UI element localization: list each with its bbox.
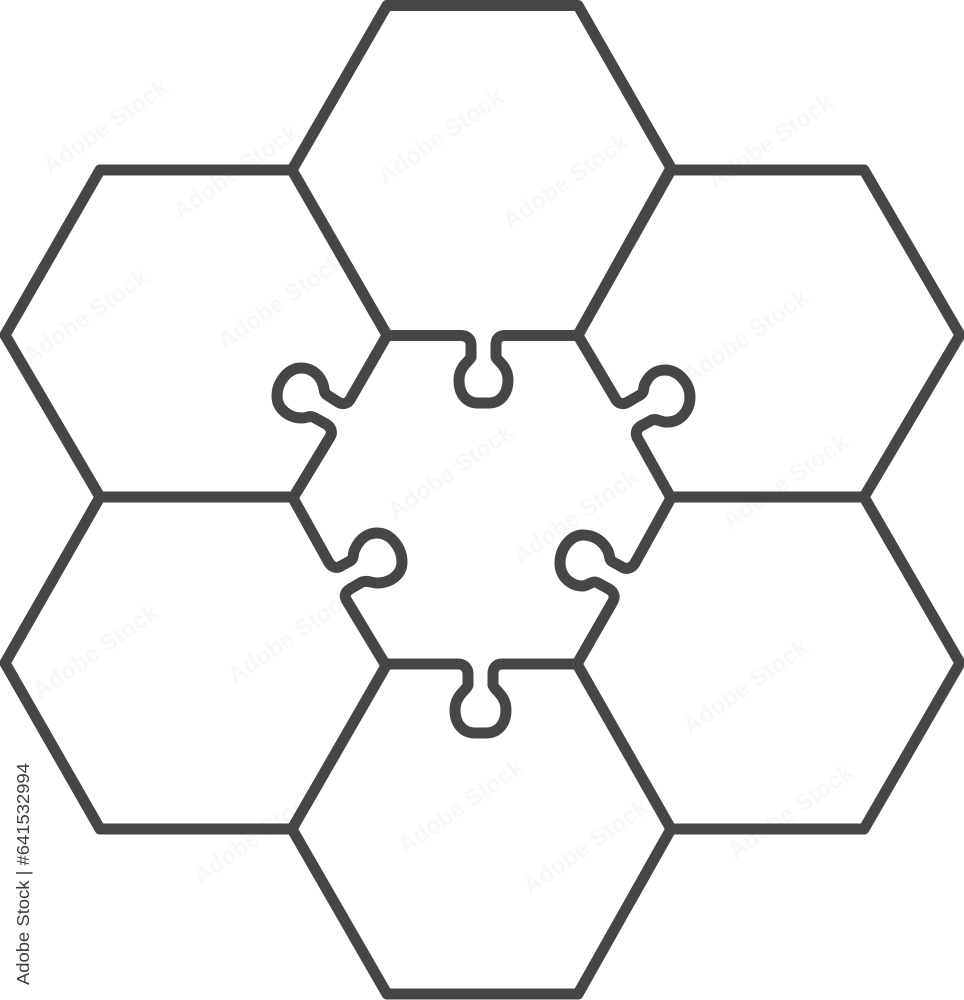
stock watermarks: Adobe Stock — [168, 118, 304, 225]
stock watermarks: Adobe Stock — [383, 418, 519, 525]
stock watermarks: Adobe Stock — [28, 598, 164, 705]
hexagon: lower right — [577, 497, 960, 829]
stock watermarks: Adobe Stock — [223, 583, 359, 690]
hexagon: upper left — [5, 170, 387, 497]
puzzle piece: top edge with tab — [387, 336, 578, 403]
stock watermarks: Adobe Stock — [508, 463, 644, 570]
puzzle piece: lower right edge with tab — [560, 498, 671, 664]
puzzle piece: lower left edge with tab — [293, 498, 402, 664]
puzzle piece: bottom edge with tab — [385, 664, 577, 733]
stock watermarks: Adobe Stock — [703, 88, 839, 195]
stock watermarks: Adobe Stock — [213, 248, 349, 355]
hexagon: upper right — [578, 170, 960, 497]
stock watermarks: Adobe Stock — [38, 73, 174, 180]
stock watermarks: Adobe Stock — [393, 753, 529, 860]
hexagon: bottom — [292, 829, 671, 994]
stock watermarks: Adobe Stock — [498, 128, 634, 235]
stock watermarks: Adobe Stock — [678, 633, 814, 740]
stock watermarks — [18, 73, 859, 900]
stock watermarks: Adobe Stock — [678, 283, 814, 390]
stock watermarks: Adobe Stock — [18, 263, 154, 370]
puzzle piece: upper right edge with tab — [578, 336, 690, 498]
credit line: Adobe Stock | #641532994 — [13, 763, 33, 985]
stock watermarks: Adobe Stock — [188, 783, 324, 890]
hexagon: top — [292, 6, 671, 335]
stock watermarks: Adobe Stock — [373, 83, 509, 190]
stock watermarks: Adobe Stock — [518, 793, 654, 900]
puzzle piece: upper left edge with tab — [277, 336, 387, 498]
hexagon: lower left — [5, 497, 387, 829]
stock watermarks: Adobe Stock — [723, 758, 859, 865]
stock watermarks: Adobe Stock — [718, 428, 854, 535]
